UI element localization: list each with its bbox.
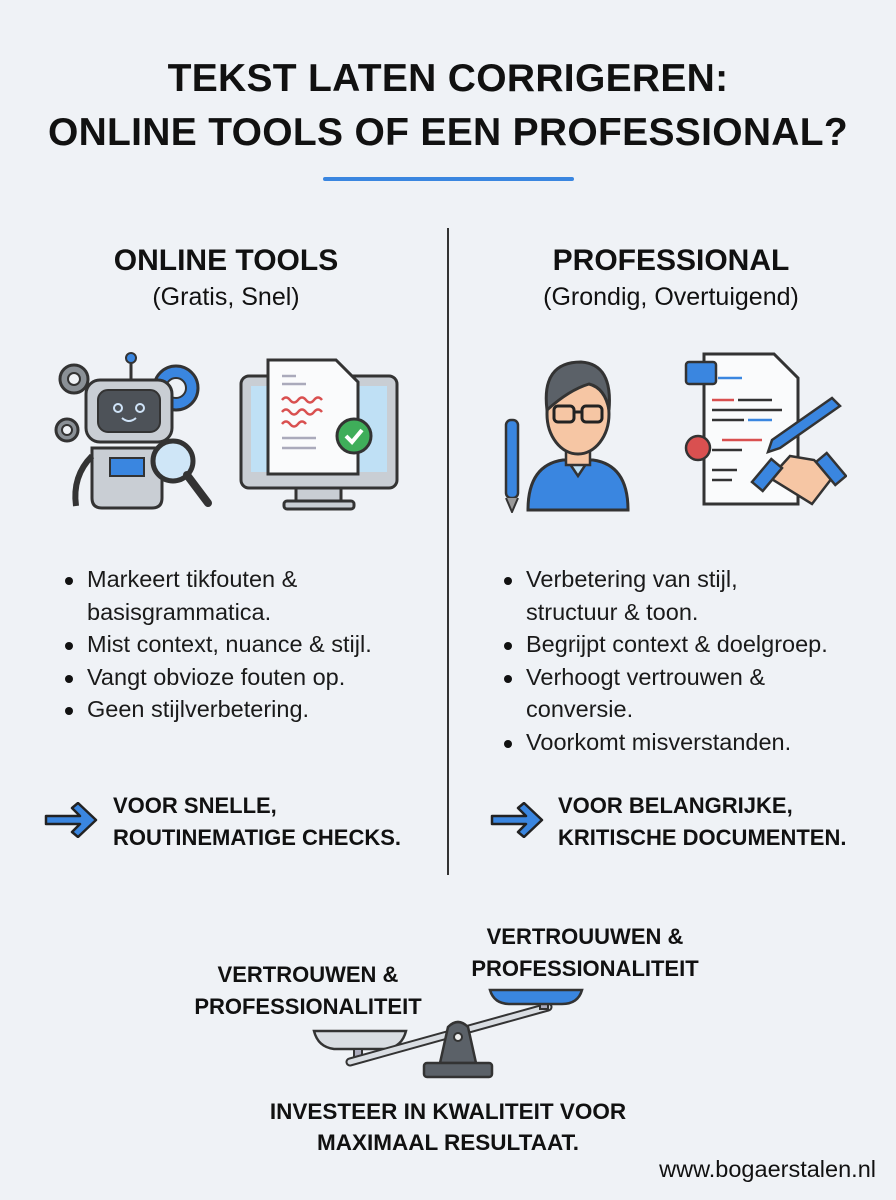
icon: robot with gears [54, 352, 212, 510]
icon: monitor with document [240, 358, 398, 510]
bullets: online tools: basisgrammatica. [87, 598, 271, 624]
conclusion text [270, 1099, 626, 1155]
bullets: online tools: Vangt obvioze fouten op. [87, 664, 345, 690]
callout: professional: VOOR BELANGRIJKE, [558, 793, 793, 818]
conclusion text: INVESTEER IN KWALITEIT VOOR [270, 1099, 626, 1124]
label: right scale: VERTROUUWEN & [487, 924, 683, 949]
heading: professional [543, 244, 799, 311]
heading: professional: PROFESSIONAL [553, 244, 789, 277]
bullets: online tools: Markeert tikfouten & [87, 566, 297, 592]
icon: arrow [490, 802, 544, 838]
label: left scale [194, 962, 422, 1019]
conclusion text: MAXIMAAL RESULTAAT. [317, 1130, 579, 1155]
bullets: professional: structuur & toon. [526, 598, 698, 624]
center divider [447, 228, 449, 875]
bullets: professional: Verbetering van stijl, [526, 566, 738, 592]
footer url: www.bogaerstalen.nl [659, 1156, 876, 1182]
bullets: professional: Verhoogt vertrouwen & [526, 664, 765, 690]
icon: person with pen [504, 360, 630, 513]
title [48, 57, 848, 154]
bullets: professional: conversie. [526, 696, 633, 722]
callout: online tools: ROUTINEMATIGE CHECKS. [113, 825, 401, 850]
title underline [323, 177, 574, 181]
icon: balance scale [312, 988, 584, 1078]
heading: online tools: ONLINE TOOLS [114, 244, 338, 277]
icon: arrow [44, 802, 98, 838]
bullets: online tools: Geen stijlverbetering. [87, 696, 309, 722]
label: left scale: PROFESSIONALITEIT [194, 994, 422, 1019]
label: right scale: PROFESSIONALITEIT [471, 956, 699, 981]
heading: online tools [114, 244, 338, 311]
callout: professional: KRITISCHE DOCUMENTEN. [558, 825, 846, 850]
heading: online tools: (Gratis, Snel) [152, 283, 300, 311]
bullets: professional [504, 566, 828, 754]
icon: document with handshake [684, 352, 847, 506]
title: ONLINE TOOLS OF EEN PROFESSIONAL? [48, 111, 848, 154]
bullets: online tools: Mist context, nuance & stijl. [87, 631, 372, 657]
bullets: professional: Begrijpt context & doelgroep. [526, 631, 828, 657]
callout: professional [490, 793, 846, 850]
title: TEKST LATEN CORRIGEREN: [168, 57, 728, 100]
label: left scale: VERTROUWEN & [218, 962, 398, 987]
callout: online tools [44, 793, 401, 850]
callout: online tools: VOOR SNELLE, [113, 793, 277, 818]
heading: professional: (Grondig, Overtuigend) [543, 283, 799, 311]
label: right scale [471, 924, 699, 981]
bullets: online tools [65, 566, 372, 722]
bullets: professional: Voorkomt misverstanden. [526, 728, 791, 754]
